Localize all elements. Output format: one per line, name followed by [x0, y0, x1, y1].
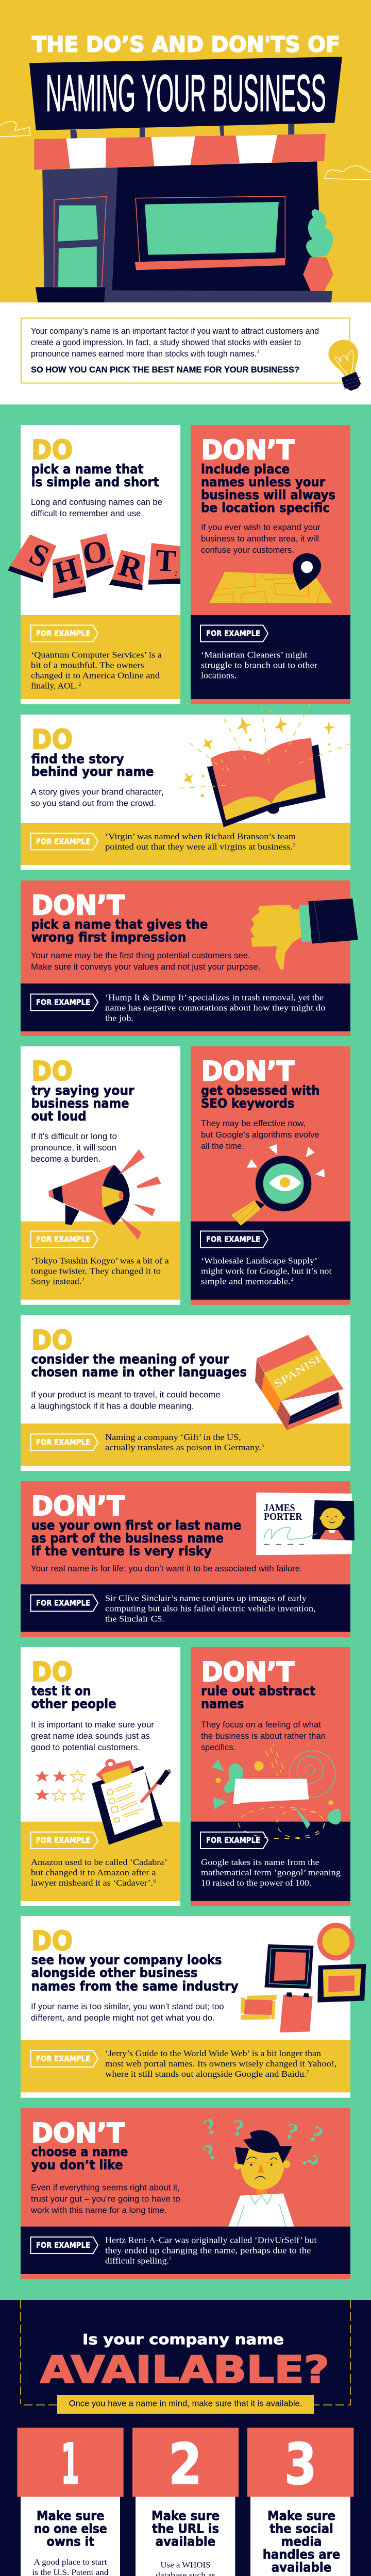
- body text: confuse your customers.: [201, 546, 294, 555]
- icon: clipboard with pen: [92, 1759, 171, 1845]
- illustration: letter tiles: S: [24, 536, 55, 574]
- heading: SEO keywords: [201, 1096, 294, 1111]
- heading: owns it: [46, 2534, 94, 2549]
- example text: but changed it to Amazon after a: [31, 1868, 156, 1877]
- intro text: pronounce names earned more than stocks with tough names.: [31, 349, 257, 359]
- number 3: 3: [284, 2431, 316, 2497]
- example text: Sir Clive Sinclair’s name conjures up images of early: [105, 1593, 307, 1603]
- heading: [201, 1083, 319, 1111]
- example text: [105, 992, 326, 1023]
- example text: locations.: [201, 671, 237, 681]
- illustration: letter tiles: T: [155, 543, 177, 578]
- illustration: letter tiles: [8, 534, 180, 598]
- body text: so you stand out from the crowd.: [31, 799, 156, 808]
- example text: [201, 1256, 332, 1286]
- label: do: DO: [31, 1325, 73, 1356]
- panel: step 2: [132, 2428, 239, 2576]
- illustration: id card: JAMES: [264, 1502, 295, 1514]
- heading: business will always: [201, 487, 335, 502]
- example text: 5: [261, 1444, 264, 1449]
- example text: 10 raised to the power of 100.: [201, 1878, 311, 1888]
- body text: [31, 951, 260, 972]
- heading: [34, 2509, 107, 2549]
- illustration: confused person: [199, 2113, 328, 2227]
- heading: behind your name: [31, 764, 154, 779]
- illustration: letter tiles: H: [50, 551, 82, 590]
- badge: for example: [31, 625, 98, 642]
- panel: don't choose a name you don't like: [21, 2108, 350, 2279]
- heading: available: AVAILABLE?: [40, 2348, 329, 2392]
- badge: for example: [31, 2237, 98, 2253]
- heading: wrong first impression: [31, 930, 186, 945]
- example text: [105, 1432, 264, 1452]
- panel: don't rule out abstract names: [191, 1647, 350, 1906]
- example text: Sony instead.: [31, 1277, 81, 1286]
- example text: [105, 2235, 317, 2265]
- panel: do test it on other people: [21, 1647, 180, 1906]
- heading: [31, 1352, 247, 1380]
- body text: Your name may be the first thing potential customers see.: [31, 951, 250, 960]
- example text: the job.: [105, 1013, 133, 1023]
- example text: 2: [82, 1278, 85, 1283]
- illustration: spanish dictionary: [255, 1335, 344, 1430]
- icon: question marks: [199, 2113, 328, 2171]
- badge: for example: FOR EXAMPLE: [36, 2241, 90, 2250]
- heading: choose a name: [31, 2144, 128, 2159]
- badge: for example: FOR EXAMPLE: [206, 1234, 260, 1244]
- heading: names: [201, 1697, 244, 1711]
- illustration: open book with stars: [180, 704, 351, 827]
- example text: changed it to America Online and: [31, 671, 160, 681]
- example text: simple and memorable.: [201, 1277, 291, 1286]
- example text: bit of a mouthful. The owners: [31, 660, 144, 670]
- label: do: DO: [31, 724, 73, 755]
- heading: Make sure: [267, 2509, 335, 2523]
- example text: [31, 650, 162, 691]
- heading: alongside other business: [31, 1965, 197, 1980]
- heading: out loud: [31, 1109, 87, 1124]
- body text: If your name is too similar, you won’t stand out; too: [31, 2002, 224, 2011]
- illustration: letter tiles: 1: [40, 570, 43, 578]
- body text: specifics.: [201, 1743, 235, 1752]
- body text: trust your gut – you’re going to have to: [31, 2195, 180, 2204]
- body text: [31, 2002, 224, 2023]
- example text: the Sinclair C5.: [105, 1614, 164, 1623]
- label: do: DO: [31, 435, 73, 466]
- icon: question marks: ?: [305, 2121, 328, 2148]
- example text: they ended up changing the name, perhaps due to the: [105, 2245, 311, 2255]
- panel: do consider other languages: [21, 1315, 350, 1471]
- heading: Make sure: [37, 2509, 105, 2523]
- body text: [31, 1132, 117, 1164]
- label: do: DO: [31, 1056, 73, 1087]
- body text: work with this name for a long time.: [30, 2206, 167, 2215]
- example text: 4: [291, 1278, 294, 1283]
- example text: Hertz Rent-A-Car was originally called ‘DrivUrSelf’ but: [105, 2235, 317, 2245]
- heading: [31, 462, 159, 489]
- label: don't: DON’T: [31, 2118, 125, 2149]
- heading: the URL is: [152, 2521, 219, 2536]
- badge: for example: FOR EXAMPLE: [36, 1598, 90, 1607]
- heading: business name: [31, 1096, 129, 1111]
- example text: Google takes its name from the: [201, 1857, 319, 1867]
- heading: media: [281, 2534, 322, 2549]
- example text: 2: [78, 682, 81, 687]
- heading: try saying your: [31, 1083, 134, 1098]
- panel: do find the story: [21, 704, 351, 870]
- heading: test it on: [31, 1684, 91, 1699]
- label: do: DO: [31, 1657, 73, 1688]
- example text: actually translates as poison in Germany.: [105, 1443, 261, 1452]
- panel: don't get obsessed with seo: [191, 1046, 350, 1305]
- body text: a laughingstock if it has a double meaning.: [31, 1401, 194, 1411]
- heading: names from the same industry: [31, 1978, 239, 1993]
- label: don't: DON’T: [201, 1056, 295, 1087]
- panel: header: [0, 0, 371, 302]
- panel: step 3: [247, 2428, 353, 2576]
- heading: handles are: [263, 2547, 340, 2562]
- body text: great name idea sounds just as: [31, 1732, 150, 1741]
- heading: use your own first or last name: [31, 1518, 241, 1533]
- illustration: spanish dictionary: SPANISH: [272, 1351, 328, 1390]
- body text: pronounce, it will soon: [31, 1143, 116, 1153]
- heading: as part of the business name: [31, 1531, 224, 1546]
- badge: for example: [31, 994, 98, 1011]
- panel: step 1: [18, 2428, 124, 2576]
- heading: be location specific: [201, 500, 330, 515]
- example text: pointed out that they were all virgins at business.: [105, 842, 293, 852]
- example text: [201, 650, 317, 681]
- heading: available: [156, 2534, 215, 2549]
- example text: difficult spelling.: [105, 2256, 169, 2265]
- heading: [201, 462, 335, 515]
- badge: for example: FOR EXAMPLE: [36, 629, 90, 638]
- example text: finally, AOL.: [31, 681, 78, 691]
- body text: [155, 2561, 216, 2576]
- heading: [263, 2509, 340, 2575]
- body text: [31, 787, 164, 808]
- badge: for example: [31, 1434, 98, 1451]
- panel: don't use your own name: [21, 1481, 355, 1637]
- badge: for example: [200, 1231, 268, 1248]
- icon: megaphone: [48, 1149, 161, 1240]
- body text: [201, 1119, 319, 1151]
- icon: light bulb: [328, 340, 361, 391]
- example text: ‘Tokyo Tsushin Kogyo’ was a bit of a: [31, 1256, 169, 1266]
- panel: do try saying it out loud: [21, 1046, 180, 1305]
- example text: Naming a company ‘Gift’ in the US,: [105, 1432, 241, 1442]
- body text: Your real name is for life; you don’t want it to be associated with failure.: [31, 1564, 302, 1573]
- section: do and don't background: [0, 404, 371, 2300]
- section: availability: [0, 2300, 371, 2576]
- example text: lawyer misheard it as ‘Cadaver’.: [31, 1878, 153, 1888]
- heading: [31, 1684, 116, 1711]
- body text: but Google’s algorithms evolve: [201, 1130, 319, 1140]
- example text: 7: [307, 2070, 309, 2075]
- heading: find the story: [31, 752, 124, 767]
- heading: [31, 917, 208, 945]
- intro question: SO HOW YOU CAN PICK THE BEST NAME FOR YOUR BUSINESS?: [31, 365, 299, 375]
- illustration: abstract shapes: [212, 1744, 341, 1839]
- heading: [151, 2509, 220, 2549]
- intro text: create a good impression. In fact, a study showed that stocks with easier to: [31, 338, 301, 347]
- heading: chosen name in other languages: [31, 1365, 247, 1380]
- label: don't: DON’T: [31, 1491, 125, 1522]
- example text: [31, 1857, 167, 1888]
- badge: for example: [31, 834, 98, 850]
- heading: [31, 1083, 134, 1124]
- callout: once you have a name: [57, 2395, 314, 2414]
- heading: include place: [201, 462, 290, 477]
- body text: A good place to start: [34, 2558, 107, 2567]
- body text: [31, 498, 162, 518]
- heading: [31, 752, 154, 779]
- badge: for example: FOR EXAMPLE: [36, 997, 90, 1007]
- illustration: letter tiles: R: [115, 548, 146, 587]
- example text: ‘Manhattan Cleaners’ might: [201, 650, 308, 660]
- illustration: letter tiles: 4: [79, 578, 83, 586]
- example text: most web portal names. Its owners wisely changed it Yahoo!,: [105, 2059, 337, 2069]
- badge: for example: FOR EXAMPLE: [36, 1836, 90, 1845]
- badge: for example: FOR EXAMPLE: [36, 837, 90, 846]
- illustration: storefront: [0, 57, 371, 302]
- heading: [31, 1953, 239, 1993]
- badge: for example: [200, 1832, 268, 1849]
- body text: [32, 2558, 108, 2576]
- body text: [31, 1720, 154, 1752]
- icon: question marks: ?: [297, 2152, 324, 2171]
- icon: question marks: ?: [283, 2117, 300, 2145]
- intro text: Your company’s name is an important factor if you want to attract customers and: [31, 327, 319, 336]
- panel: do see how your company looks: [21, 1916, 366, 2098]
- body text: [201, 523, 321, 555]
- label: do: DO: [31, 1926, 73, 1957]
- body text: [201, 1720, 326, 1752]
- intro text: [31, 327, 319, 359]
- icon: magnifying glass with eye: [231, 1144, 325, 1226]
- heading: is your company name: Is your company name: [82, 2331, 284, 2348]
- icon: thumbs down: [250, 899, 358, 970]
- illustration: map and pin: [209, 553, 332, 603]
- example text: 6: [154, 1879, 156, 1884]
- example text: ‘Jerry’s Guide to the World Wide Web’ is a bit longer than: [105, 2048, 322, 2058]
- callout: once you have a name: Once you have a name in mind, make sure that it is available.: [69, 2399, 302, 2409]
- body text: good to potential customers.: [31, 1743, 140, 1752]
- body text: If you ever wish to expand your: [201, 523, 321, 532]
- body text: It is important to make sure your: [31, 1720, 154, 1730]
- heading: consider the meaning of your: [31, 1352, 229, 1367]
- body text: all the time.: [201, 1142, 244, 1151]
- heading: the social: [269, 2521, 333, 2536]
- body text: business to another area, it will: [201, 534, 319, 544]
- example text: 2: [169, 2257, 172, 2262]
- title line one: THE DO’S AND DON'TS OF: [32, 32, 340, 57]
- heading: is simple and short: [31, 474, 159, 489]
- icon: question marks: ?: [200, 2113, 220, 2140]
- icon: rating stars: [35, 1771, 85, 1801]
- panel: introduction: [21, 318, 361, 391]
- illustration: id card: PORTER: [264, 1511, 302, 1522]
- body text: Make sure it conveys your values and not just your purpose.: [31, 962, 260, 972]
- badge: for example: FOR EXAMPLE: [36, 1234, 90, 1244]
- badge: for example: [200, 625, 268, 642]
- illustration: letter tiles: 1: [138, 578, 141, 586]
- example text: [105, 1593, 316, 1623]
- badge: for example: [31, 1231, 98, 1248]
- panel: don't give the wrong impression: [21, 880, 358, 1036]
- heading: pick a name that gives the: [31, 917, 208, 932]
- heading: pick a name that: [31, 462, 144, 477]
- example text: ‘Quantum Computer Services’ is a: [31, 650, 162, 660]
- example text: [201, 1857, 341, 1888]
- label: don't: DON’T: [201, 435, 295, 466]
- badge: for example: [31, 1595, 98, 1612]
- icon: question marks: ?: [199, 2138, 221, 2166]
- body text: [31, 1390, 221, 1411]
- example text: Amazon used to be called ‘Cadabra’: [31, 1857, 167, 1867]
- example text: struggle to branch out to other: [201, 660, 317, 670]
- intro text: 1: [257, 349, 260, 354]
- panel: don't include place names: [191, 425, 350, 704]
- example text: ‘Virgin’ was named when Richard Branson’s team: [105, 832, 296, 841]
- illustration: letter tiles: 1: [174, 570, 177, 578]
- body text: If your product is meant to travel, it could become: [31, 1390, 221, 1399]
- example text: ‘Wholesale Landscape Supply’: [201, 1256, 317, 1266]
- example text: where it still stands out alongside Google and Baidu.: [105, 2069, 307, 2079]
- heading: [31, 1518, 241, 1558]
- heading: see how your company looks: [31, 1953, 222, 1968]
- heading: [201, 1684, 315, 1711]
- badge: for example: [31, 2050, 98, 2067]
- example text: [31, 1256, 169, 1286]
- heading: get obsessed with: [201, 1083, 319, 1098]
- body text: Long and confusing names can be: [31, 498, 162, 507]
- example text: might work for Google, but it’s not: [201, 1266, 332, 1276]
- heading: available: [272, 2560, 331, 2575]
- heading: [31, 2144, 128, 2173]
- heading: rule out abstract: [201, 1684, 315, 1699]
- body text: difficult to remember and use.: [31, 509, 143, 518]
- icon: question marks: ?: [232, 2115, 245, 2141]
- label: don't: DON’T: [201, 1657, 295, 1688]
- heading: other people: [31, 1697, 116, 1711]
- example text: name has negative connotations about how they might do: [105, 1003, 326, 1012]
- example text: [105, 2048, 337, 2079]
- example text: tongue twister. They changed it to: [31, 1266, 161, 1276]
- body text: They focus on a feeling of what: [201, 1720, 321, 1730]
- badge: for example: FOR EXAMPLE: [206, 629, 260, 638]
- heading: you don’t like: [31, 2158, 123, 2173]
- body text: A story gives your brand character,: [31, 787, 164, 796]
- body text: Use a WHOIS: [161, 2561, 210, 2569]
- heading: no one else: [34, 2521, 107, 2536]
- body text: the business is about rather than: [201, 1732, 326, 1741]
- illustration: letter tiles: 1: [107, 556, 110, 564]
- badge: for example: [31, 1832, 98, 1849]
- number 2: 2: [168, 2431, 202, 2497]
- label: don't: DON’T: [31, 890, 125, 921]
- illustration: picture frames: [241, 1923, 366, 2032]
- badge: for example: FOR EXAMPLE: [36, 2054, 90, 2063]
- heading: Make sure: [151, 2509, 220, 2523]
- body text: different, and people might not get what you do.: [31, 2013, 215, 2023]
- illustration: id card: [256, 1493, 355, 1555]
- heading: if the venture is very risky: [31, 1544, 212, 1558]
- body text: become a burden.: [31, 1155, 100, 1164]
- badge: for example: FOR EXAMPLE: [206, 1836, 260, 1845]
- example text: mathematical term ’googol’ meaning: [201, 1868, 341, 1877]
- heading: names unless your: [201, 474, 326, 489]
- body text: They may be effective now,: [201, 1119, 306, 1128]
- illustration: letter tiles: O: [80, 534, 109, 571]
- body text: [30, 2183, 180, 2215]
- panel: step 1: 1: [61, 2431, 79, 2497]
- panel: do pick a simple name: [8, 425, 180, 704]
- example text: ‘Hump It & Dump It’ specializes in trash removal, yet the: [105, 992, 324, 1002]
- body text: If it’s difficult or long to: [31, 1132, 117, 1141]
- example text: [105, 832, 296, 852]
- body text: Even if everything seems right about it,: [31, 2183, 180, 2193]
- badge: for example: FOR EXAMPLE: [36, 1437, 90, 1447]
- example text: 3: [293, 843, 296, 848]
- example text: computing but also his failed electric vehicle invention,: [105, 1603, 316, 1613]
